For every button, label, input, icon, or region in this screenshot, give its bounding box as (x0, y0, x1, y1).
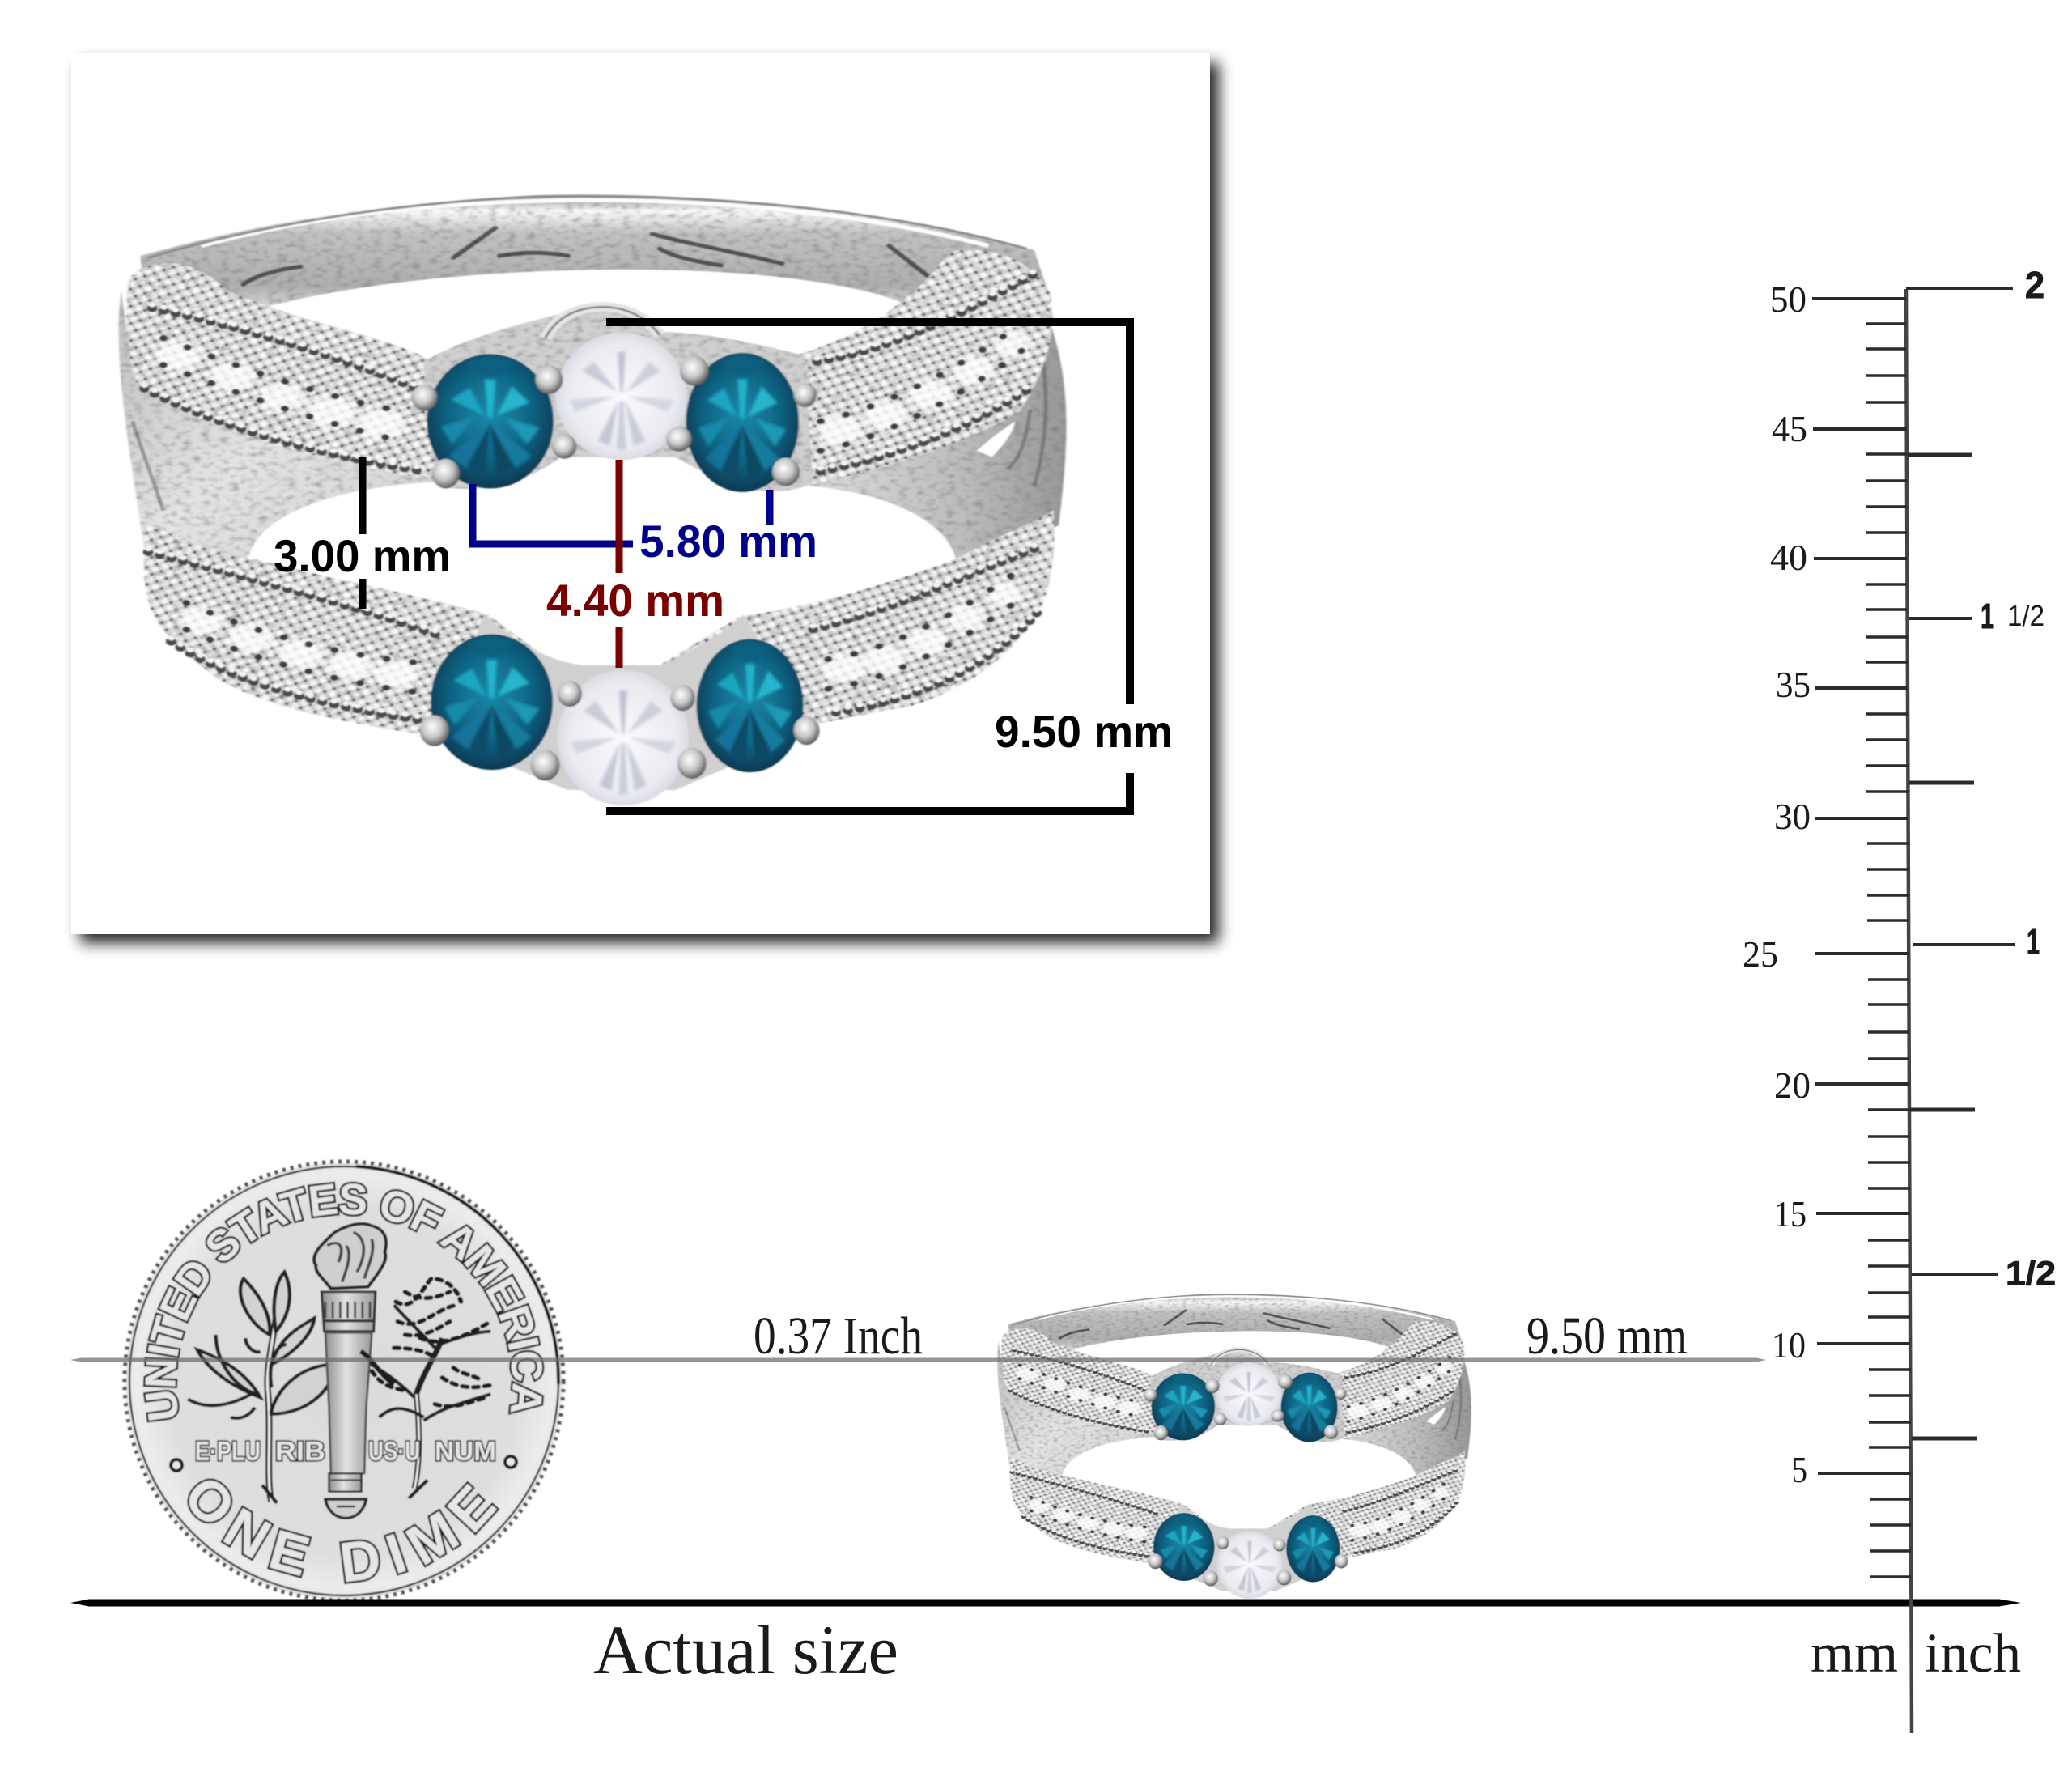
millimetre scale numbers: 50 (1770, 278, 1807, 320)
icon: US dime for scale comparison (121, 1159, 567, 1600)
inch scale labels: 1 (1981, 597, 1994, 636)
millimetre scale numbers: 40 (1770, 537, 1807, 578)
millimetre scale numbers: 10 (1772, 1324, 1806, 1366)
millimetre minor ticks (1866, 324, 1911, 1577)
enlarged ring photo illustration (119, 196, 1066, 805)
millimetre scale numbers: 15 (1774, 1193, 1807, 1234)
coin legend separators (171, 1456, 516, 1471)
dimension: 9.50 mm total height bracket (606, 322, 1173, 811)
dimension: 4.40 mm center height: 4.40 mm (546, 575, 724, 626)
panel: enlarged ring with measurements (71, 53, 1210, 934)
coin legend: E PLURIBUS UNUM: E·PLU (195, 1436, 261, 1466)
millimetre scale numbers: 35 (1776, 664, 1811, 705)
label: 0.37 Inch: 0.37 Inch (754, 1307, 923, 1366)
dimension: 5.80 mm stone span (473, 484, 817, 567)
ruler: millimetres and inches (1743, 264, 2056, 1733)
label: Actual size: Actual size (593, 1611, 898, 1689)
panel background with drop shadow (71, 53, 1210, 934)
coin legend: E PLURIBUS UNUM: NUM (435, 1436, 496, 1466)
grey height reference line (70, 1358, 1766, 1362)
millimetre scale numbers: 20 (1774, 1064, 1811, 1106)
inch scale labels: 2 (2025, 264, 2044, 306)
coin legend: E PLURIBUS UNUM: RIB (275, 1436, 325, 1466)
millimetre scale numbers: 5 (1792, 1449, 1807, 1490)
black baseline (70, 1600, 2021, 1606)
label: 9.50 mm: 9.50 mm (1526, 1307, 1688, 1366)
coin legend: E PLURIBUS UNUM: US·U (368, 1436, 420, 1466)
ruler spine (1906, 289, 1912, 1733)
millimetre scale numbers: 25 (1743, 933, 1778, 975)
dimension: 9.50 mm total height bracket: 9.50 mm (995, 706, 1173, 757)
millimetre major ticks (1812, 299, 1911, 1473)
coin legend: UNITED STATES OF AMERICA: UNITED STATES OF AMERICA (142, 1180, 546, 1423)
inch scale ticks (1906, 288, 2015, 1438)
millimetre scale numbers (1743, 278, 1811, 1490)
label: inch unit: inch (1925, 1622, 2021, 1684)
label: mm unit: mm (1811, 1622, 1898, 1684)
coin legend: E PLURIBUS UNUM (195, 1436, 496, 1466)
millimetre scale numbers: 30 (1774, 796, 1811, 837)
actual-size ring illustration (997, 1294, 1471, 1599)
millimetre scale numbers: 45 (1772, 408, 1807, 449)
inch scale labels: 1/2 (2006, 1254, 2056, 1292)
dimension: 3.00 mm gap height: 3.00 mm (274, 530, 451, 581)
inch scale labels (1981, 264, 2056, 1292)
dimension: 5.80 mm stone span: 5.80 mm (639, 516, 817, 567)
inch scale labels: 1 (2027, 922, 2040, 962)
coin legend: ONE DIME: ONE DIME (186, 1478, 500, 1585)
inch scale labels: 1/2 (2007, 599, 2044, 632)
